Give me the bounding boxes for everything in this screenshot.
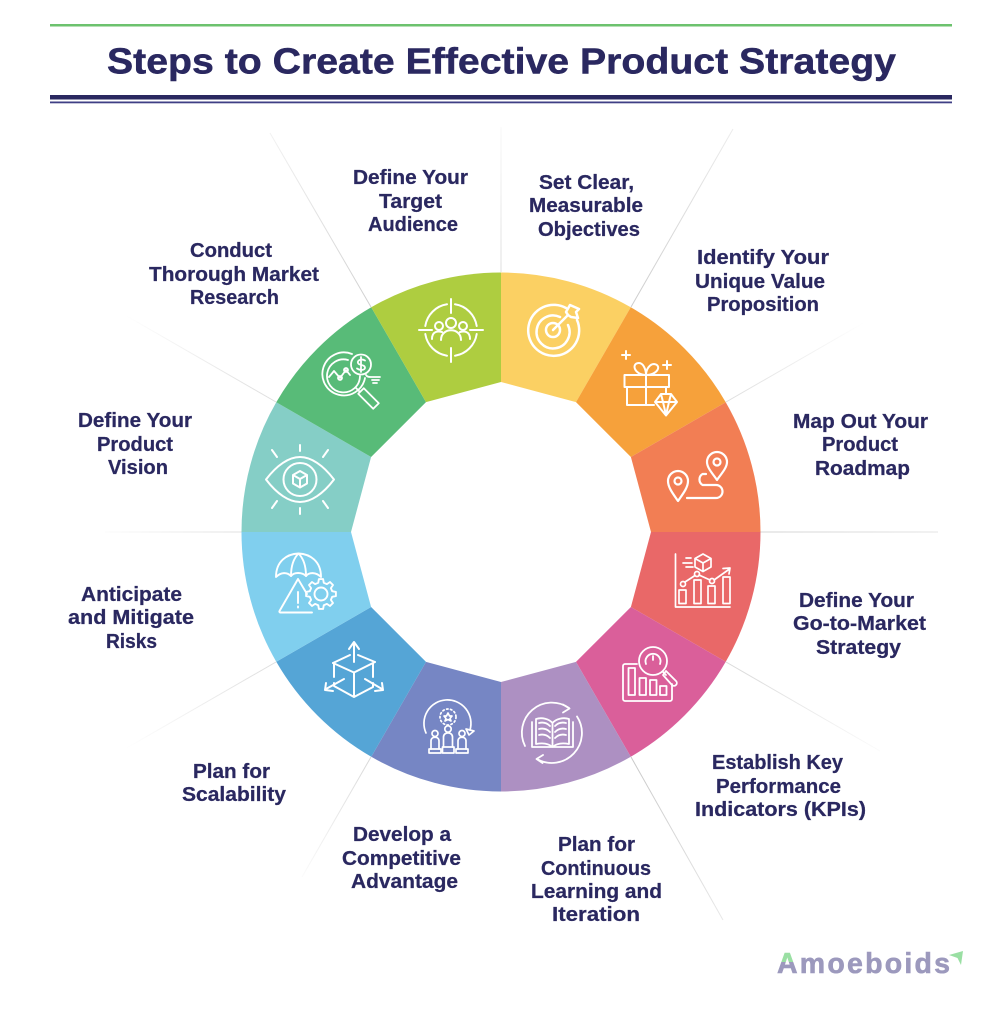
label: define product vision: Define Your xyxy=(78,410,192,432)
icon: go-to-market chart xyxy=(676,554,730,607)
label: conduct market research: Thorough Market xyxy=(149,264,319,286)
label: conduct market research: Research xyxy=(190,287,279,309)
label: plan for scalability: Plan for xyxy=(193,761,270,783)
label: product roadmap xyxy=(793,411,928,480)
label: define your target audience: Define Your xyxy=(353,167,468,189)
icon: market research magnifier xyxy=(322,352,380,409)
segment: competitive advantage xyxy=(371,662,501,792)
label: competitive advantage: Advantage xyxy=(351,871,458,893)
label: unique value proposition: Unique Value xyxy=(695,271,825,293)
icon: target audience xyxy=(419,299,483,362)
label: define your target audience: Audience xyxy=(368,214,458,236)
label: key performance indicators xyxy=(695,752,866,821)
top green rule xyxy=(50,24,952,26)
label: anticipate and mitigate risks: and Mitigate xyxy=(68,607,194,629)
label: anticipate and mitigate risks: Risks xyxy=(106,631,157,653)
label: anticipate and mitigate risks xyxy=(68,584,194,653)
radial leader lines xyxy=(105,127,938,920)
icon: gift with diamond xyxy=(622,351,677,416)
segment: product vision xyxy=(242,402,371,532)
icon: competitive advantage podium xyxy=(424,700,474,753)
label: key performance indicators: Indicators (KPIs) xyxy=(695,799,866,821)
label: product roadmap: Map Out Your xyxy=(793,411,928,433)
logo: green arrow xyxy=(949,951,963,965)
label: set clear measurable objectives xyxy=(529,172,643,241)
label: continuous learning: Plan for xyxy=(558,834,635,856)
segment: continuous learning xyxy=(501,662,631,792)
segment: value proposition xyxy=(576,307,726,457)
label: set clear measurable objectives: Set Clear, xyxy=(539,172,634,194)
label: plan for scalability xyxy=(182,761,287,806)
label: unique value proposition: Identify Your xyxy=(697,247,829,269)
segment: risks xyxy=(242,532,371,662)
segment: market research xyxy=(276,307,426,457)
label: unique value proposition: Proposition xyxy=(707,294,819,316)
label: continuous learning: Iteration xyxy=(552,904,640,926)
label: competitive advantage: Competitive xyxy=(342,848,461,870)
icon: roadmap pins xyxy=(668,452,727,501)
label: continuous learning: Learning and xyxy=(531,881,662,903)
label: define product vision: Product xyxy=(97,434,173,456)
label: set clear measurable objectives: Measurable xyxy=(529,195,643,217)
label: go-to-market strategy: Strategy xyxy=(816,637,902,659)
label: key performance indicators: Performance xyxy=(716,776,841,798)
icon: bullseye target xyxy=(528,305,579,356)
segmented ring xyxy=(242,272,760,792)
icon: book with cycle arrows xyxy=(522,703,582,763)
segment: set objectives xyxy=(501,272,631,402)
label: define your target audience xyxy=(353,167,468,236)
label: continuous learning: Continuous xyxy=(541,858,651,880)
icon: KPI magnifier bars xyxy=(623,647,677,701)
segment: roadmap xyxy=(631,402,760,532)
label: key performance indicators: Establish Key xyxy=(712,752,844,774)
label: define product vision xyxy=(78,410,192,479)
label: go-to-market strategy xyxy=(793,590,926,659)
logo: Amoeboids: Amoeboids xyxy=(777,948,950,980)
segment: scalability xyxy=(276,607,426,757)
label: continuous learning xyxy=(531,834,662,926)
label: conduct market research: Conduct xyxy=(190,240,272,262)
label: product roadmap: Roadmap xyxy=(815,458,910,480)
label: competitive advantage: Develop a xyxy=(353,824,452,846)
title double rule xyxy=(50,95,952,103)
label: anticipate and mitigate risks: Anticipate xyxy=(81,584,182,606)
label: plan for scalability: Scalability xyxy=(182,784,287,806)
icon: umbrella, warning and gear xyxy=(276,554,336,612)
label: unique value proposition xyxy=(695,247,829,316)
label: competitive advantage xyxy=(342,824,461,893)
label: go-to-market strategy: Go-to-Market xyxy=(793,613,926,635)
label: conduct market research xyxy=(149,240,319,309)
label: set clear measurable objectives: Objectives xyxy=(538,219,640,241)
label: define your target audience: Target xyxy=(379,191,442,213)
label: define product vision: Vision xyxy=(108,457,168,479)
icon: vision eye xyxy=(266,445,334,514)
icon: scalable cube xyxy=(325,642,383,697)
segment: target audience xyxy=(371,272,501,402)
segment: go-to-market xyxy=(631,532,760,662)
title: Steps to Create Effective Product Strategy xyxy=(107,40,896,82)
label: product roadmap: Product xyxy=(822,434,898,456)
label: go-to-market strategy: Define Your xyxy=(799,590,914,612)
segment: KPIs xyxy=(576,607,726,757)
